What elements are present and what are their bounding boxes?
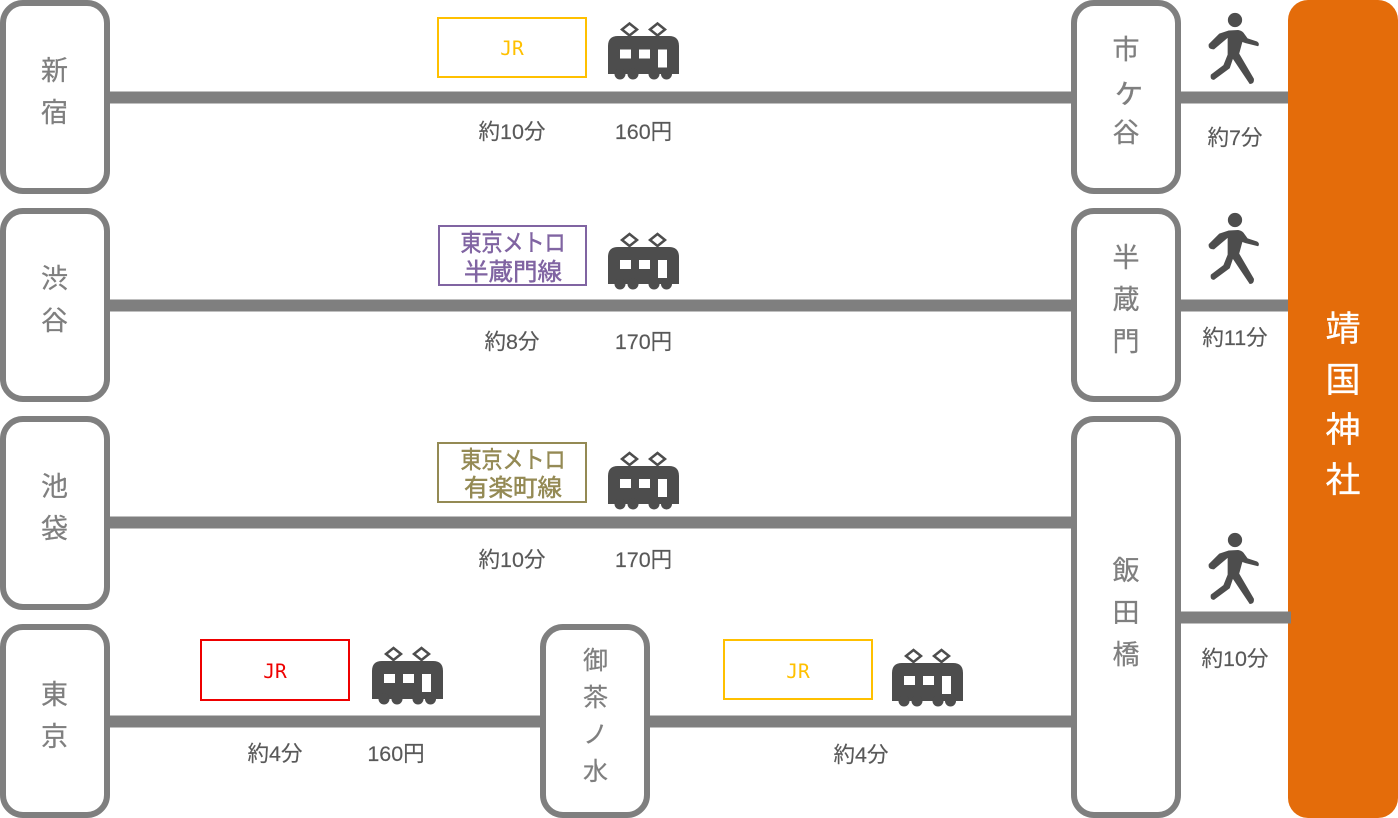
icon: train, row 3 <box>608 453 679 510</box>
icon: train, row 2 <box>608 234 679 290</box>
line badge: Tokyo Metro Hanzomon: 半蔵門線 <box>464 259 562 286</box>
line: Ikebukuro to Iidabashi <box>105 516 1075 528</box>
destination panel: Yasukuni Shrine: 神 <box>1325 411 1361 450</box>
station: Iidabashi <box>1074 419 1178 815</box>
line badge: JR yellow, row 4 <box>724 640 872 699</box>
line: Hanzomon walk <box>1176 300 1290 312</box>
station: Ochanomizu: 水 <box>583 758 608 786</box>
line badge: JR yellow, row 1 <box>438 18 586 77</box>
line: Iidabashi walk <box>1176 612 1291 624</box>
line badge: Tokyo Metro Yurakucho: 有楽町線 <box>464 475 562 502</box>
station: Ikebukuro: 袋 <box>41 514 68 544</box>
line: Tokyo to Iidabashi <box>105 716 1075 728</box>
icon: walker, Hanzomon <box>1209 213 1259 284</box>
label: row 1 fare: 160円 <box>615 120 672 144</box>
label: row 4 right time: 約4分 <box>834 743 888 767</box>
station: Ichigaya <box>1074 3 1178 191</box>
destination panel: Yasukuni Shrine: 社 <box>1325 461 1361 500</box>
icon: walker, Ichigaya <box>1209 13 1259 84</box>
line: Shibuya to Hanzomon <box>105 300 1075 312</box>
line badge: JR red <box>201 640 349 700</box>
line badge: Tokyo Metro Yurakucho: 東京メトロ <box>460 447 566 474</box>
station: Hanzomon <box>1074 211 1178 399</box>
station: Iidabashi: 田 <box>1112 598 1140 628</box>
station: Tokyo: 東 <box>41 680 68 710</box>
destination panel: Yasukuni Shrine: 国 <box>1325 361 1361 400</box>
station: Ichigaya: 谷 <box>1112 118 1140 148</box>
station: Tokyo <box>3 627 107 815</box>
station: Ochanomizu: 茶 <box>583 684 608 712</box>
destination panel: Yasukuni Shrine: 靖 <box>1325 310 1361 349</box>
station: Ikebukuro <box>3 419 107 607</box>
line: Ichigaya walk <box>1176 92 1290 104</box>
destination panel: Yasukuni Shrine <box>1288 0 1398 818</box>
station: Tokyo: 京 <box>41 722 68 752</box>
station: Shibuya: 谷 <box>41 306 68 336</box>
icon: train, row 4 left <box>372 648 443 704</box>
line: Shinjuku to Ichigaya <box>105 92 1075 104</box>
station: Shinjuku <box>3 3 107 191</box>
station: Ichigaya: ヶ <box>1112 72 1146 109</box>
line badge: Tokyo Metro Hanzomon: 東京メトロ <box>460 230 566 257</box>
station: Hanzomon: 門 <box>1112 327 1140 357</box>
label: walk from Ichigaya: 約7分 <box>1208 126 1262 150</box>
label: row 3 time: 約10分 <box>479 548 545 572</box>
station: Iidabashi: 飯 <box>1112 556 1140 586</box>
label: row 2 fare: 170円 <box>615 330 672 354</box>
station: Hanzomon: 半 <box>1112 243 1140 273</box>
label: walk from Iidabashi: 約10分 <box>1202 647 1268 671</box>
line badge: JR red: JR <box>263 660 287 683</box>
icon: walker, Iidabashi <box>1209 533 1259 604</box>
label: row 4 left fare: 160円 <box>367 742 425 766</box>
label: row 4 left time: 約4分 <box>248 742 302 766</box>
station: Ochanomizu <box>543 627 647 815</box>
station: Ochanomizu: ノ <box>583 721 608 749</box>
label: walk from Hanzomon: 約11分 <box>1202 326 1268 350</box>
label: row 2 time: 約8分 <box>485 330 539 354</box>
line badge: Tokyo Metro Yurakucho <box>438 443 586 502</box>
icon: train, row 1 <box>608 24 679 80</box>
icon: train, row 4 right <box>892 650 963 706</box>
station: Hanzomon: 蔵 <box>1112 285 1140 315</box>
station: Ochanomizu: 御 <box>583 647 608 675</box>
station: Shinjuku: 新 <box>41 56 68 86</box>
station: Shinjuku: 宿 <box>41 98 68 128</box>
station: Ikebukuro: 池 <box>41 472 68 502</box>
station: Shibuya <box>3 211 107 399</box>
label: row 3 fare: 170円 <box>615 548 672 572</box>
label: row 1 time: 約10分 <box>479 120 545 144</box>
station: Iidabashi: 橋 <box>1112 640 1140 670</box>
line badge: Tokyo Metro Hanzomon <box>439 226 586 286</box>
line badge: JR yellow, row 4: JR <box>786 660 810 683</box>
station: Ichigaya: 市 <box>1112 35 1140 65</box>
station: Shibuya: 渋 <box>41 264 68 294</box>
line badge: JR yellow, row 1: JR <box>500 37 524 60</box>
